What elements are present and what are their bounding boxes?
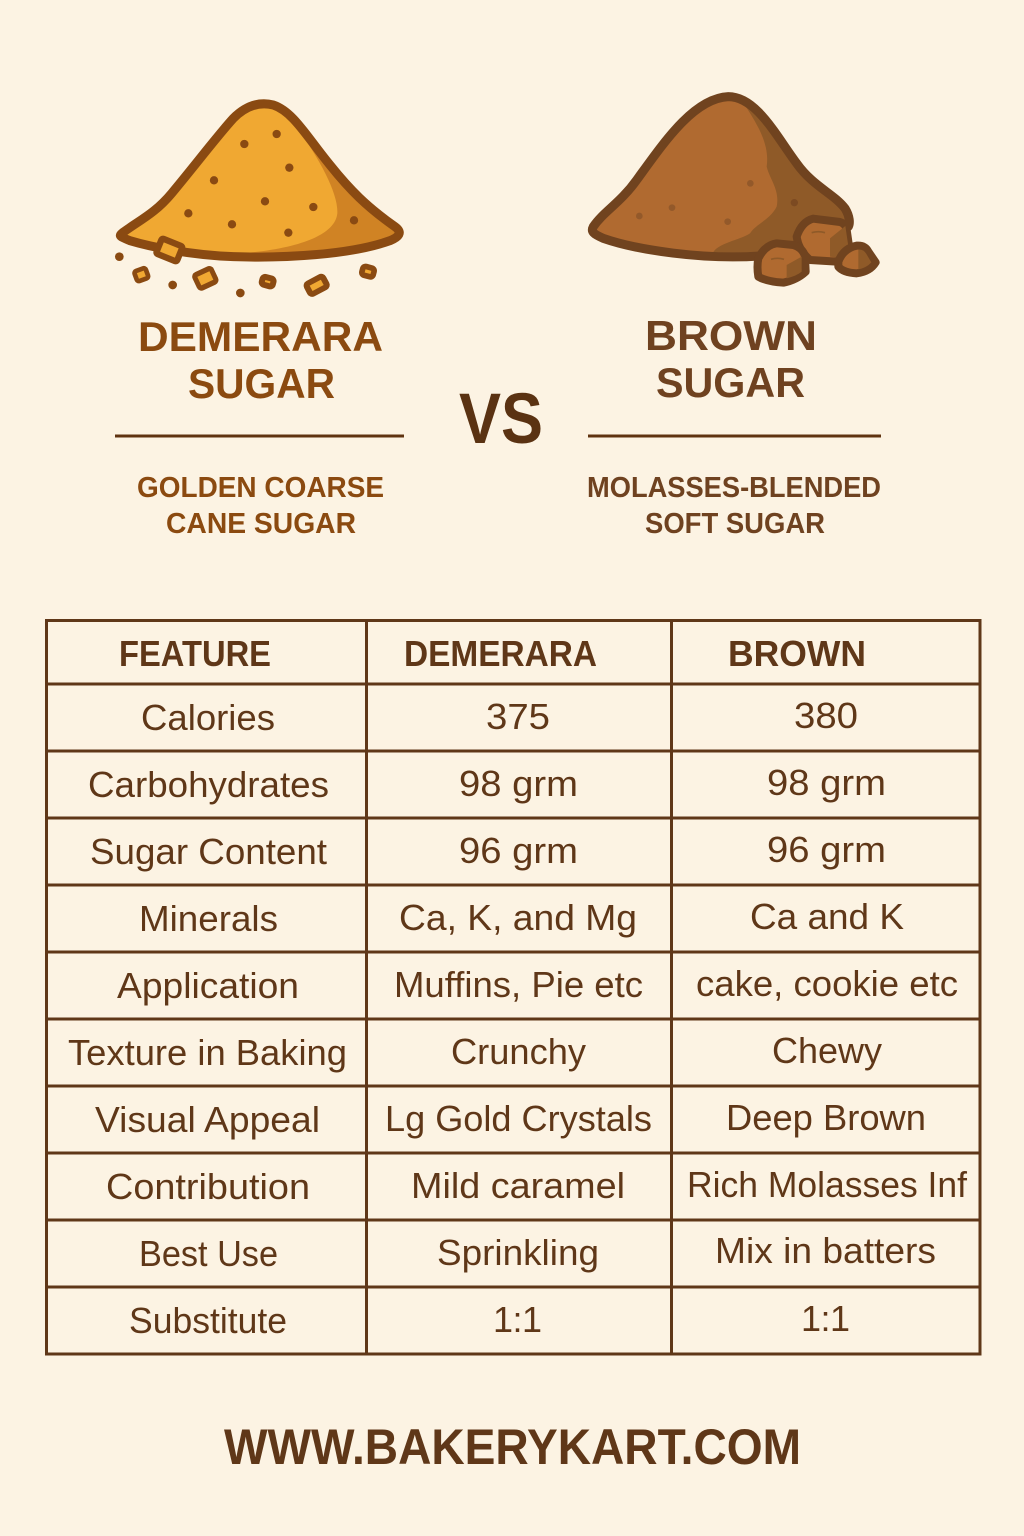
table column: feature: Calories [141,697,275,738]
table column: demerara: Crunchy [451,1031,586,1072]
table column: feature: Carbohydrates [88,764,329,805]
table column: demerara: 96 grm [459,830,578,871]
table column: feature: Substitute [129,1300,287,1341]
subtitle: golden coarse cane sugar [137,472,384,540]
table column: demerara: 375 [486,696,550,737]
table column: brown: Chewy [772,1030,882,1071]
table column: demerara: Mild caramel [411,1165,625,1206]
table header row: FEATURE [119,633,271,674]
title: brown sugar: BROWN [645,312,817,359]
table column: brown: 1:1 [801,1298,850,1339]
table header row [119,633,866,674]
table column: brown: cake, cookie etc [696,963,958,1004]
table column: demerara [385,696,652,1340]
icon: brown sugar pile with lumps [592,97,876,283]
table column: demerara: 1:1 [493,1299,542,1340]
table column: brown: Deep Brown [726,1097,926,1138]
panel: brown sugar header [587,97,881,540]
table column: brown: 98 grm [767,762,886,803]
table column: feature: Texture in Baking [68,1032,347,1073]
title: brown sugar [645,312,817,406]
table column: demerara: Lg Gold Crystals [385,1098,652,1139]
table column: feature: Minerals [139,898,278,939]
subtitle: molasses-blended soft sugar: MOLASSES-BLENDED [587,472,881,504]
table header row: DEMERARA [404,633,597,674]
vs label: VS [459,380,543,459]
comparison table [46,620,980,1354]
title: demerara sugar: DEMERARA [138,313,383,360]
table column: demerara: Sprinkling [437,1232,599,1273]
table column: feature: Best Use [139,1233,278,1274]
table column: brown: 96 grm [767,829,886,870]
panel: demerara sugar header [115,104,407,540]
subtitle: golden coarse cane sugar: CANE SUGAR [166,508,356,540]
table column: demerara: Muffins, Pie etc [394,964,643,1005]
title: demerara sugar: SUGAR [188,360,335,407]
table column: feature: Visual Appeal [95,1099,320,1140]
subtitle: molasses-blended soft sugar [587,472,881,540]
table column: demerara: Ca, K, and Mg [399,897,637,938]
table column: feature: Contribution [106,1166,310,1207]
subtitle: golden coarse cane sugar: GOLDEN COARSE [137,472,384,504]
table column: feature: Sugar Content [90,831,327,872]
table header row: BROWN [728,633,866,674]
table column: brown: 380 [794,695,858,736]
footer: website url: WWW.BAKERYKART.COM [224,1419,801,1475]
table column: demerara: 98 grm [459,763,578,804]
table column: brown [687,695,968,1339]
subtitle: molasses-blended soft sugar: SOFT SUGAR [645,508,825,540]
title: demerara sugar [138,313,383,407]
table column: brown: Rich Molasses Inf [687,1164,968,1205]
table column: feature: Application [117,965,299,1006]
icon: demerara sugar pile [115,104,407,297]
table column: brown: Ca and K [750,896,904,937]
table column: feature [68,697,347,1341]
title: brown sugar: SUGAR [656,359,805,406]
table column: brown: Mix in batters [715,1230,936,1271]
